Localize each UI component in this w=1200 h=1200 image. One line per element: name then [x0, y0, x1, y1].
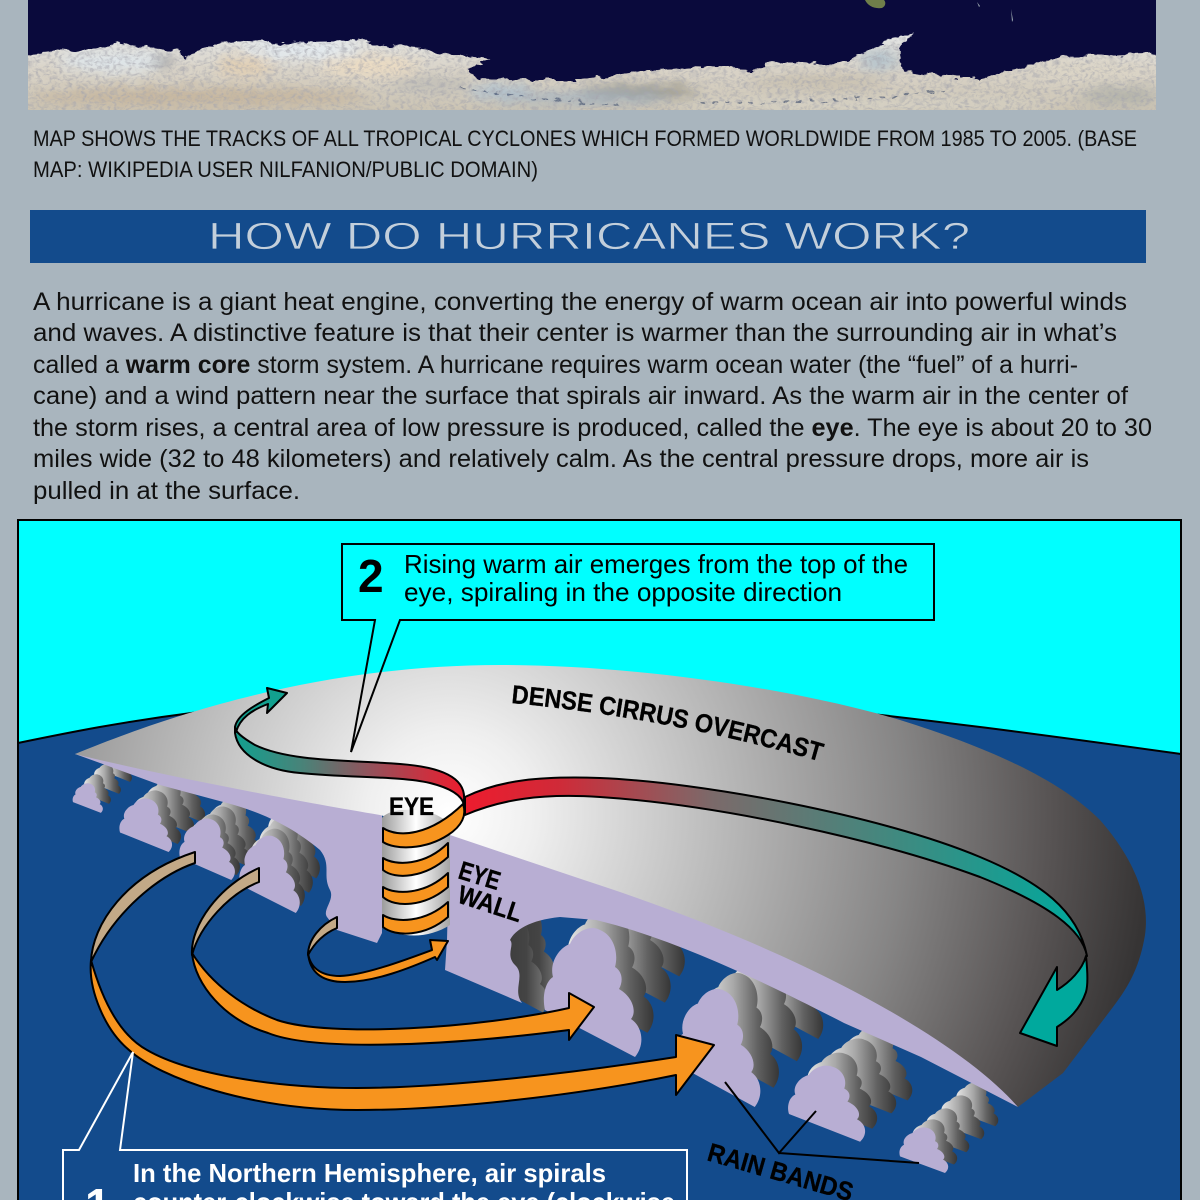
callout 2: rising warm air: 2: [358, 550, 384, 602]
rain bands pointer lines: [725, 1082, 919, 1163]
intro paragraph: miles wide (32 to 48 kilometers) and relatively calm. As the central pressure drops, more air is: [33, 445, 1089, 473]
rain band clouds, right side: [477, 863, 998, 1173]
map caption: [33, 126, 1137, 182]
intro paragraph: the storm rises, a central area of low pressure is produced, called the eye. The eye is about 20 to 30: [33, 414, 1152, 442]
rain band clouds, left side: [73, 752, 320, 913]
intro paragraph: pulled in at the surface.: [33, 477, 300, 505]
inflow arrow: inner: [308, 917, 448, 982]
upper outflow ribbon, right: red to teal with arrow: [465, 778, 1088, 1046]
callout 1: air spirals toward the eye: [63, 1052, 687, 1200]
heading: how do hurricanes work: HOW DO HURRICANES WORK?: [208, 216, 970, 258]
callout 2: rising warm air: Rising warm air emerges from the top of the: [404, 549, 908, 579]
label: dense cirrus overcast: DENSE CIRRUS OVERCAST: [512, 685, 825, 760]
intro paragraph: called a warm core storm system. A hurricane requires warm ocean water (the “fuel” of a hurri-: [33, 351, 1078, 379]
intro paragraph: [33, 288, 1152, 505]
intro paragraph: and waves. A distinctive feature is that their center is warmer than the surrounding air in what’s: [33, 319, 1117, 347]
inflow arrow: outer: [91, 852, 714, 1110]
panel: hurricane cross-section diagram: [17, 519, 1182, 1200]
map caption: MAP: WIKIPEDIA USER NILFANION/PUBLIC DOMAIN): [33, 157, 538, 182]
callout 2: rising warm air: eye, spiraling in the opposite direction: [404, 577, 842, 607]
label: eye wall: WALL: [454, 879, 526, 928]
cloud deck underside, left: [75, 740, 382, 943]
eye column: [382, 810, 450, 936]
label: eye wall: EYE: [455, 855, 504, 896]
label: eye: EYE: [389, 793, 434, 821]
heading: how do hurricanes work: [30, 210, 1146, 263]
inflow arrow: middle: [192, 868, 594, 1045]
intro paragraph: cane) and a wind pattern near the surface that spirals air inward. As the warm air in the center of: [33, 382, 1128, 410]
sky: [18, 520, 1181, 1200]
dense cirrus overcast top surface: [75, 665, 1146, 1107]
callout 2: rising warm air: [342, 544, 934, 752]
top orange band joining the eye spiral: [383, 804, 464, 847]
orange spiral bands in eye: [383, 843, 448, 934]
cloud deck underside and eye wall, right: [445, 825, 1018, 1107]
world map of cyclone tracks (bottom edge): [28, 0, 1156, 110]
callout 1: air spirals toward the eye: In the Northern Hemisphere, air spirals: [133, 1158, 606, 1188]
ocean: [18, 690, 1181, 1200]
panel border: [18, 520, 1181, 1200]
intro paragraph: A hurricane is a giant heat engine, converting the energy of warm ocean air into powerful winds: [33, 288, 1127, 316]
upper outflow ribbon, left: red to teal with arrow: [235, 688, 464, 805]
label: eye wall: [454, 855, 526, 928]
